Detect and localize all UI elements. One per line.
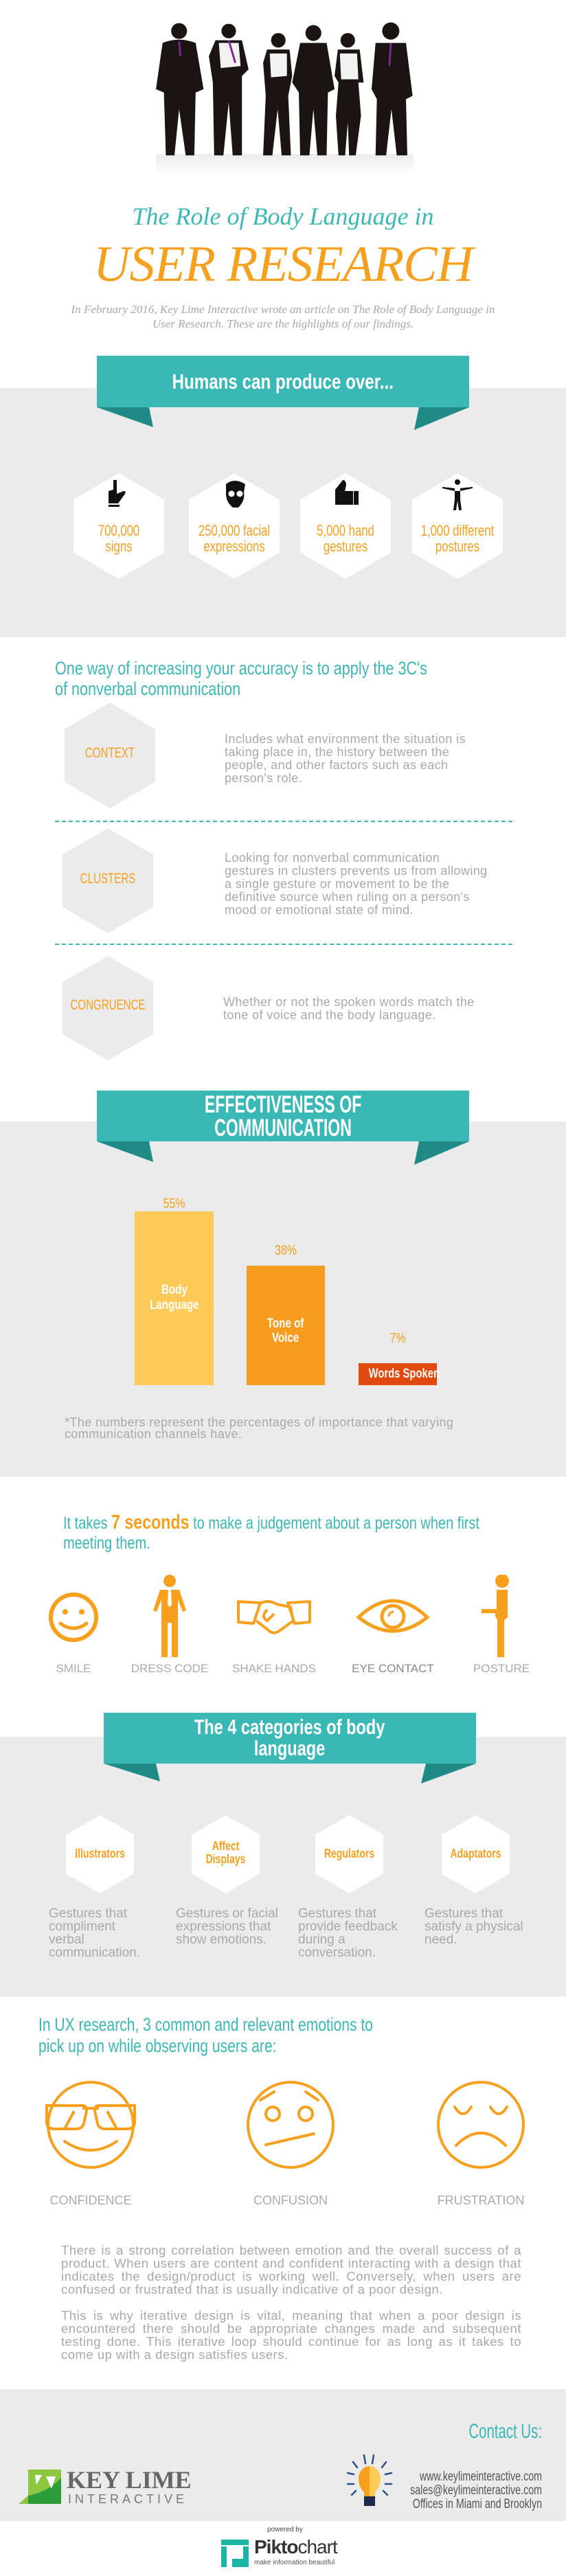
powered by piktochart: Piktochart <box>254 2536 337 2557</box>
icon: standing figure <box>442 479 473 510</box>
contact details <box>410 2470 542 2511</box>
icon: thumbs up <box>335 480 359 505</box>
divider <box>55 821 512 822</box>
heading: 7 seconds: It takes 7 seconds to make a judgement about a person when first meeting them. <box>63 1512 479 1553</box>
banner: 4 categories: language <box>254 1736 326 1760</box>
stat: 250,000 facial expressions: 250,000 facial <box>199 522 270 539</box>
3C item: clusters: Looking for nonverbal communication gestures in clusters prevents us from allowing a single gesture or movement to be the definitive source when ruling on a person's mood or emotional state of mind. <box>225 851 488 917</box>
contact details: www.keylimeinteractive.com <box>420 2470 542 2484</box>
3C item: clusters: CLUSTERS <box>80 871 135 887</box>
3C item: congruence <box>63 956 475 1060</box>
3C item: context <box>65 703 466 808</box>
stat: 250,000 facial expressions <box>189 473 280 579</box>
heading: 3C's: One way of increasing your accuracy is to apply the 3C's of nonverbal communication <box>55 658 427 699</box>
icon: pointing hand <box>109 480 126 507</box>
stat: 700,000 signs <box>73 473 164 579</box>
background band: humans <box>0 388 566 637</box>
category: regulators <box>298 1815 398 1960</box>
banner: humans can produce over: Humans can produce over... <box>172 369 394 394</box>
icon: shake hands <box>232 1600 316 1675</box>
icon: smile: SMILE <box>56 1662 91 1675</box>
bar chart: communication channels <box>135 1196 440 1385</box>
bar chart: communication channels: Voice <box>272 1331 299 1345</box>
category: affect displays: Gestures or facial expressions that show emotions. <box>176 1906 278 1947</box>
divider <box>55 944 512 945</box>
footnote: *The numbers represent the percentages of importance that varying communication channels have. <box>65 1415 453 1441</box>
category: affect displays: Displays <box>206 1852 245 1866</box>
title line 1: The Role of Body Language in <box>133 203 433 230</box>
banner: effectiveness of communication <box>97 1091 469 1165</box>
category: regulators: Regulators <box>324 1847 374 1860</box>
heading: contact us: Contact Us: <box>468 2420 542 2443</box>
background band: categories <box>0 1737 566 1996</box>
3C item: clusters <box>63 828 488 933</box>
subtitle: In February 2016, Key Lime Interactive wrote an article on The Role of Body Language in User Research. These are the highlights of our findings. <box>71 303 495 330</box>
bar chart: communication channels: Body <box>161 1283 187 1297</box>
emotion: confidence: CONFIDENCE <box>49 2193 132 2207</box>
emotion: confusion <box>247 2081 335 2207</box>
stat: 250,000 facial expressions: expressions <box>203 538 265 555</box>
powered by piktochart: powered by <box>267 2526 303 2533</box>
title line 2: USER RESEARCH <box>93 236 473 293</box>
bar chart: communication channels: 55% <box>163 1196 185 1211</box>
category: affect displays: Affect <box>212 1839 239 1853</box>
paragraph: iterative design: This is why iterative design is vital, meaning that when a poor design is encountered there should be appropriate changes made and subsequent testing done. This iterative loop should continue for as long as it takes to come up with a design satisfies users. <box>61 2308 521 2362</box>
category: adaptators: Adaptators <box>450 1847 501 1860</box>
icon: dress code <box>131 1575 208 1675</box>
bar chart: communication channels: 7% <box>389 1331 406 1346</box>
banner: humans can produce over <box>97 356 469 430</box>
stat: 5,000 hand gestures <box>300 473 391 579</box>
category: illustrators <box>49 1815 140 1960</box>
icon: shake hands: SHAKE HANDS <box>232 1662 316 1675</box>
category: illustrators: Gestures that compliment verbal communication. <box>49 1906 140 1960</box>
icon: posture: POSTURE <box>473 1662 530 1675</box>
icon: face <box>226 481 245 508</box>
3C item: context: CONTEXT <box>85 745 135 761</box>
stat: 1,000 different postures: postures <box>435 538 479 555</box>
emotion: frustration <box>437 2081 525 2207</box>
3C item: congruence: CONGRUENCE <box>70 997 146 1013</box>
icon: light bulb <box>346 2454 393 2506</box>
powered by piktochart: make information beautiful <box>254 2559 335 2566</box>
banner: 4 categories: The 4 categories of body <box>194 1715 385 1739</box>
banner: effectiveness of communication: COMMUNICATION <box>214 1115 352 1141</box>
illustration: business people silhouettes <box>156 22 414 166</box>
stat: 700,000 signs: 700,000 <box>98 522 139 539</box>
stat: 1,000 different postures: 1,000 different <box>421 522 494 539</box>
category: regulators: Gestures that provide feedback during a conversation. <box>298 1906 398 1960</box>
stat: 700,000 signs: signs <box>105 538 133 555</box>
bar chart: communication channels: Words Spoken <box>369 1367 440 1381</box>
3C item: context: Includes what environment the situation is taking place in, the history between the people, and other factors such as each person's role. <box>225 732 466 785</box>
icon: eye contact: EYE CONTACT <box>352 1662 434 1675</box>
stat: 1,000 different postures <box>412 473 503 579</box>
contact details: Offices in Miami and Brooklyn <box>413 2497 542 2511</box>
category: affect displays <box>176 1815 278 1947</box>
emotion: confidence <box>45 2081 136 2207</box>
icon: posture <box>473 1575 530 1675</box>
bar chart: communication channels: Tone of <box>267 1317 304 1331</box>
heading: emotions: In UX research, 3 common and relevant emotions to pick up on while observing users are: <box>38 2014 373 2056</box>
stat: 5,000 hand gestures: gestures <box>324 538 367 555</box>
emotion: confusion: CONFUSION <box>253 2193 328 2207</box>
category: adaptators: Gestures that satisfy a physical need. <box>424 1906 523 1947</box>
contact details: sales@keylimeinteractive.com <box>410 2483 542 2498</box>
banner: effectiveness of communication: EFFECTIVENESS OF <box>205 1091 361 1118</box>
paragraph: correlation: There is a strong correlation between emotion and the overall success of a product. When users are content and confident interacting with a design that indicates the design/product is working well. Conversely, when users are confused or frustrated that is usually indicative of a poor design. <box>61 2243 521 2296</box>
category: adaptators <box>424 1815 523 1947</box>
logo: key lime interactive <box>19 2466 192 2506</box>
logo: key lime interactive: INTERACTIVE <box>68 2492 188 2506</box>
category: illustrators: Illustrators <box>75 1847 125 1860</box>
3C item: congruence: Whether or not the spoken words match the tone of voice and the body language. <box>223 995 475 1022</box>
icon: dress code: DRESS CODE <box>131 1662 208 1675</box>
background band: effectiveness <box>0 1121 566 1477</box>
icon: eye contact <box>352 1599 434 1675</box>
powered by piktochart <box>221 2526 338 2567</box>
bar chart: communication channels: Language <box>150 1298 199 1312</box>
banner: 4 categories <box>104 1713 476 1783</box>
stat: 5,000 hand gestures: 5,000 hand <box>317 522 374 539</box>
icon: smile <box>49 1593 98 1675</box>
bar chart: communication channels: 38% <box>275 1243 297 1258</box>
logo: key lime interactive: KEY LIME <box>67 2466 192 2494</box>
emotion: frustration: FRUSTRATION <box>438 2193 524 2207</box>
background band: footer <box>0 2389 566 2521</box>
